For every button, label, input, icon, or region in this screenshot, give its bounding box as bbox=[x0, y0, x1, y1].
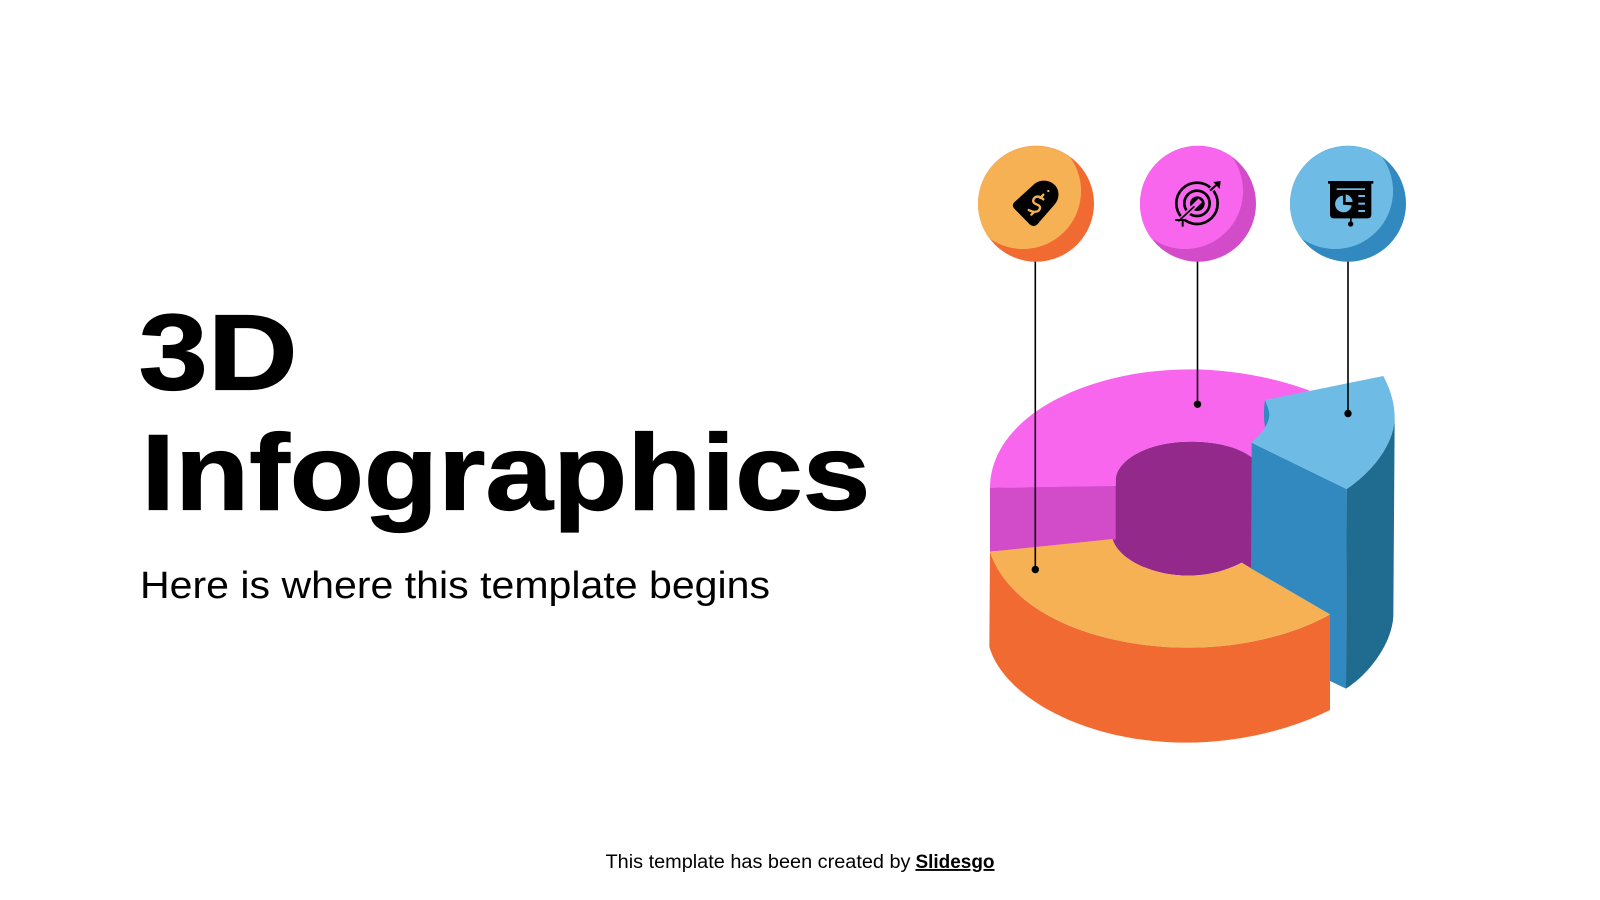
title: Infographics bbox=[141, 412, 870, 532]
segment: teal outer side bbox=[1346, 418, 1395, 689]
connector: target to pink segment bbox=[1194, 258, 1201, 408]
segment: blue notch bbox=[1264, 400, 1273, 427]
inner hole wall bbox=[1113, 442, 1253, 576]
subtitle: Here is where this template begins bbox=[140, 565, 770, 607]
connector: price tag to orange segment bbox=[1032, 258, 1039, 573]
icon badge: price tag bbox=[978, 146, 1094, 262]
footer credit: This template has been created by bbox=[606, 852, 911, 873]
3D donut chart bbox=[989, 369, 1395, 743]
connector: presentation to blue segment bbox=[1344, 258, 1352, 417]
segment: orange side bbox=[989, 552, 1330, 743]
title bbox=[139, 292, 870, 532]
footer credit: Slidesgo bbox=[916, 852, 994, 873]
title: 3D bbox=[139, 292, 298, 412]
segment: pink side bbox=[990, 486, 1117, 552]
segment: light blue top bbox=[1252, 376, 1395, 489]
segment: orange top bbox=[990, 539, 1330, 648]
icon badge: presentation board bbox=[1290, 146, 1406, 262]
segment: pink top bbox=[990, 369, 1310, 488]
segment: blue front wall bbox=[1251, 443, 1347, 689]
icon badge: target bbox=[1140, 146, 1256, 262]
